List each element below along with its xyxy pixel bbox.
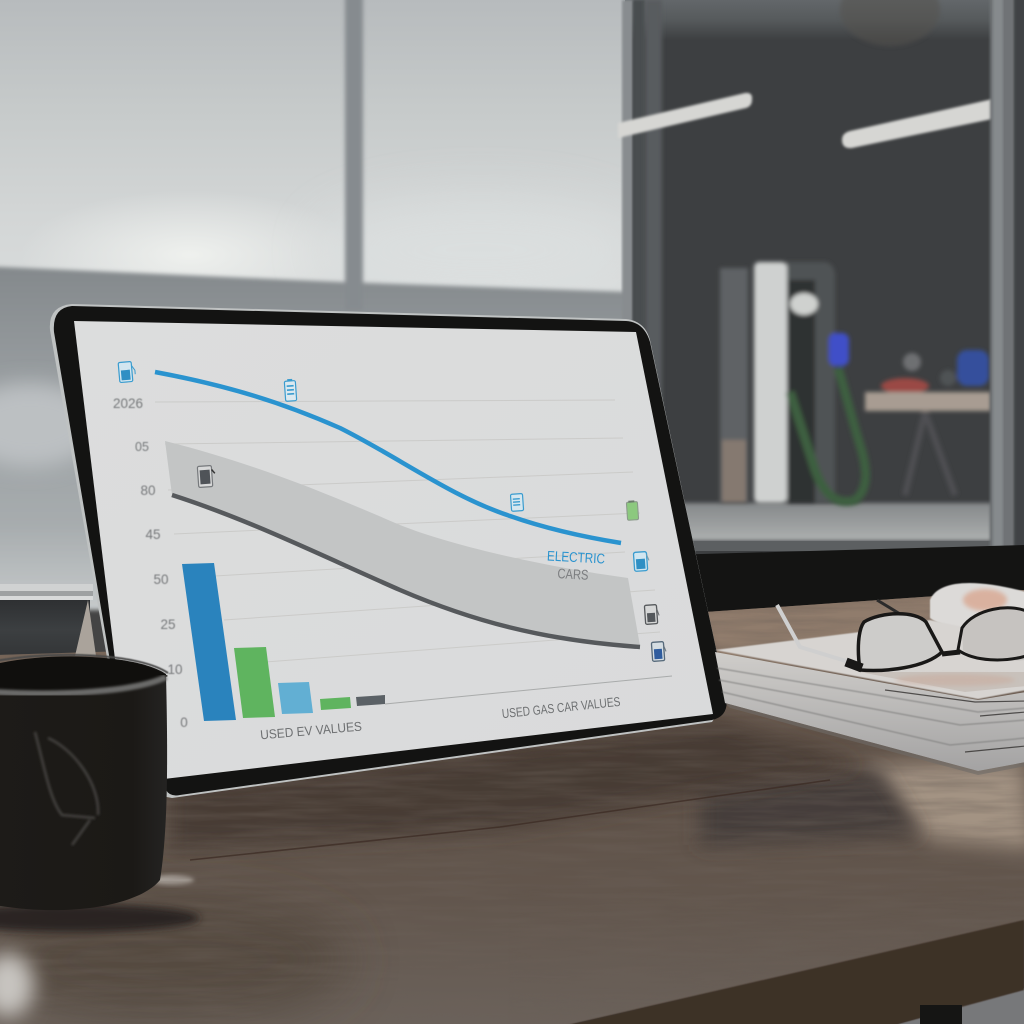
window view outside [0, 0, 640, 610]
icon: grey fuel pump in band [197, 465, 216, 487]
wooden desk [0, 590, 1024, 1024]
y axis labels: 45 [145, 527, 161, 542]
icon: battery on electric line [284, 379, 297, 401]
left window ledge [0, 584, 93, 660]
dark window sill [630, 545, 1024, 625]
interior room seen through the glass [622, 0, 1000, 560]
magazine pages side [715, 652, 1024, 771]
y axis labels: 50 [153, 572, 169, 587]
EV charging station in background [720, 262, 865, 503]
icon: blue fuel pump right [633, 551, 650, 571]
icon: navy fuel pump right [651, 641, 667, 661]
rolled magazine [930, 583, 1024, 636]
chart grid lines [155, 400, 672, 704]
background table [865, 350, 991, 495]
series label: cars: CARS [557, 565, 589, 583]
coffee mug [0, 655, 200, 932]
right window frame [990, 0, 1024, 555]
grey value band [165, 441, 640, 646]
tablet silver edge [50, 304, 727, 798]
y axis labels: 2026 [113, 396, 143, 411]
window mullion [345, 0, 363, 310]
icon: green battery [626, 500, 639, 520]
stack of magazines [715, 583, 1024, 775]
bar chart [182, 563, 385, 721]
y axis labels: 05 [135, 440, 149, 454]
magazine top cover [715, 620, 1024, 699]
tablet [50, 304, 727, 798]
tablet screen [74, 321, 713, 783]
y axis labels: 25 [160, 617, 176, 632]
icon: battery on lower electric line [510, 494, 524, 511]
tablet stand [75, 600, 96, 656]
desk front edge and floor [550, 920, 1024, 1024]
y axis labels [113, 396, 188, 730]
eyeglasses [777, 600, 1024, 670]
y axis labels: 10 [167, 662, 183, 677]
ceiling lights [618, 93, 997, 148]
axis label: used EV values: USED EV VALUES [260, 719, 363, 742]
icon: blue fuel pump top left [118, 361, 136, 383]
icon: dark fuel pump right [644, 604, 660, 624]
series label: electric: ELECTRIC [547, 547, 605, 567]
y axis labels: 80 [140, 483, 156, 498]
electric car value line [155, 372, 621, 543]
gas car value line [172, 495, 640, 647]
y axis labels: 0 [180, 715, 188, 730]
tablet bezel [54, 306, 727, 795]
axis label: used gas car values: USED GAS CAR VALUES [501, 694, 621, 721]
